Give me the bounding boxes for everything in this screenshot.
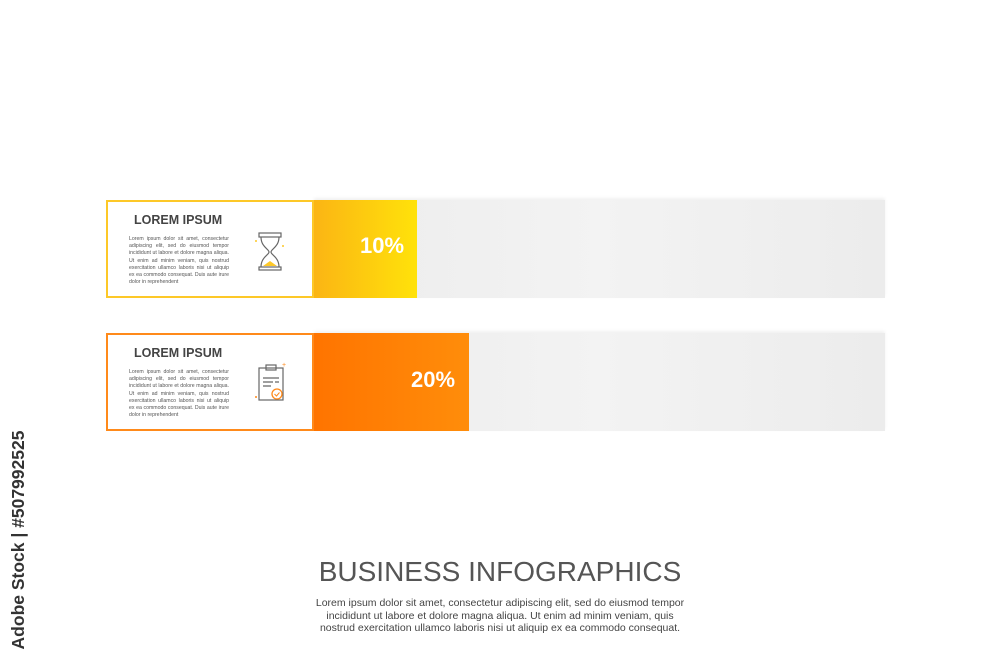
card 1 [106, 200, 314, 298]
label 20%: 20% [411, 367, 455, 392]
card 1: Lorem ipsum dolor sit amet, consectetur adipiscing elit, sed do eiusmod tempor incididunt ut labore et dolore magna aliqua. Ut enim ad minim veniam, quis nostrud exercitation ullamco laboris nisi ut aliquip ex ea commodo consequat. Duis aute irure dolor in reprehendent [129, 236, 229, 285]
icon: clipboard: + [282, 362, 286, 369]
track 1 [314, 200, 885, 298]
fill 20% [314, 333, 469, 431]
title: BUSINESS INFOGRAPHICS [319, 556, 681, 587]
watermark id: Adobe Stock | #507992525 [8, 431, 28, 649]
row 2 [106, 332, 885, 431]
track 2 [314, 333, 885, 431]
icon: hourglass [255, 232, 284, 271]
fill 10% [314, 200, 417, 298]
card 2: Lorem ipsum dolor sit amet, consectetur adipiscing elit, sed do eiusmod tempor incididunt ut labore et dolore magna aliqua. Ut enim ad minim veniam, quis nostrud exercitation ullamco laboris nisi ut aliquip ex ea commodo consequat. Duis aute irure dolor in reprehendent [129, 369, 229, 418]
card 2: LOREM IPSUM [134, 346, 222, 360]
row 1 [106, 198, 885, 298]
label 10%: 10% [360, 233, 404, 258]
subtitle text: Lorem ipsum dolor sit amet, consectetur adipiscing elit, sed do eiusmod tempor incididunt ut labore et dolore magna aliqua. Ut enim ad minim veniam, quis nostrud exercitation ullamco laboris nisi ut aliquip ex ea commodo consequat. [316, 597, 684, 634]
card 1: LOREM IPSUM [134, 213, 222, 227]
icon: clipboard [255, 362, 286, 401]
card 2 [106, 333, 314, 431]
